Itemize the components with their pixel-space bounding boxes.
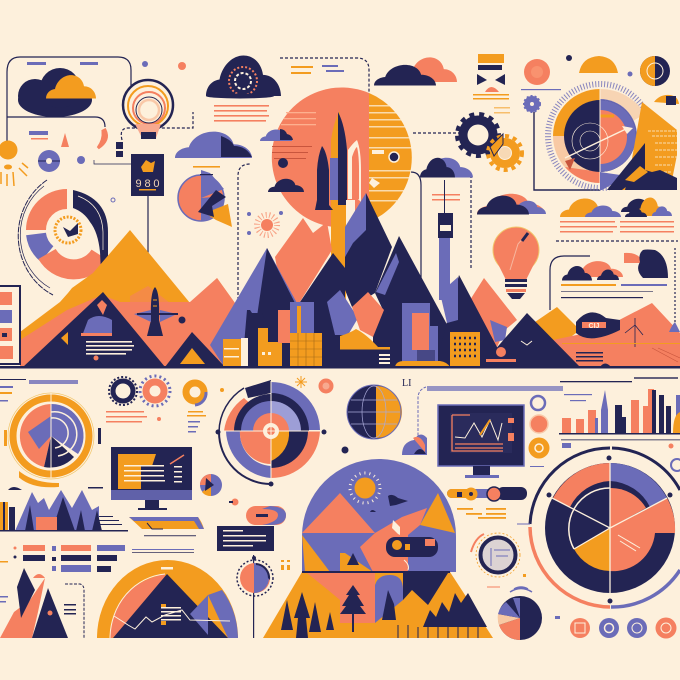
small pie chart with navy wedge <box>178 166 232 227</box>
cloud group lower right <box>561 250 668 298</box>
lower heading lines <box>0 377 678 440</box>
orange lamp bulb <box>493 227 539 299</box>
cloud: navy top centre with badge <box>206 56 281 98</box>
keyboard tray <box>129 517 204 536</box>
navy triangle details <box>61 300 205 364</box>
cloud: navy and orange top left <box>18 68 96 117</box>
dial gauge <box>471 533 526 587</box>
legend bars <box>0 545 194 572</box>
score card 980: 980 <box>136 178 160 190</box>
text lines right <box>560 221 674 232</box>
small gauge chart bar <box>237 555 290 638</box>
small sun top right and domes <box>521 55 679 105</box>
cloud top centre right <box>374 57 457 86</box>
rocket <box>315 111 361 300</box>
airplane <box>134 287 186 336</box>
text lines coral <box>214 65 344 122</box>
light bulb with rings <box>123 80 173 139</box>
pie chart with wifi arcs <box>498 587 560 640</box>
sun badge <box>247 211 283 235</box>
donut chart left <box>18 180 115 295</box>
forest range left <box>0 487 128 532</box>
coral text lines bottom <box>106 376 334 432</box>
sun icon left <box>0 140 28 186</box>
cloud row mid right <box>477 194 672 217</box>
ground strip <box>0 366 680 368</box>
slider control <box>447 487 527 519</box>
monitor right with chart <box>438 405 524 478</box>
twin peaks bottom left <box>0 568 84 638</box>
connector lines top <box>7 57 678 340</box>
gauge chart bottom left <box>4 393 101 486</box>
gears <box>457 114 522 170</box>
small gear purple <box>524 96 540 112</box>
tower and cloud <box>412 158 473 305</box>
big sun circle with stripes <box>272 88 413 228</box>
dome chart <box>97 560 238 638</box>
small labels left <box>27 61 186 172</box>
bar chart <box>559 389 680 448</box>
gears row bottom <box>109 376 206 406</box>
badge emblem <box>576 312 620 338</box>
mountains back row <box>20 193 680 368</box>
landscape dome <box>302 459 456 573</box>
score card 980 <box>131 154 164 196</box>
target chart <box>216 380 326 486</box>
clouds small on sun <box>260 129 304 192</box>
text banner top <box>473 54 510 114</box>
badge emblem: CIJ <box>589 323 600 330</box>
radial gauge top right <box>548 84 652 190</box>
mini pie <box>200 474 222 496</box>
large ring pie chart <box>517 448 680 607</box>
round icons right of monitor <box>528 396 550 467</box>
icon row bottom right <box>570 459 680 638</box>
city buildings <box>223 302 480 368</box>
cloud: purple and navy <box>175 132 252 158</box>
globe and small cloud <box>342 385 427 455</box>
left data card <box>0 286 20 364</box>
monitor left <box>111 447 192 510</box>
lower heading lines: LI <box>402 378 411 389</box>
orange mountain with pines <box>263 571 493 638</box>
note card <box>217 498 286 551</box>
wind turbine and lower details <box>486 318 680 367</box>
mountain top right orange <box>607 102 678 190</box>
